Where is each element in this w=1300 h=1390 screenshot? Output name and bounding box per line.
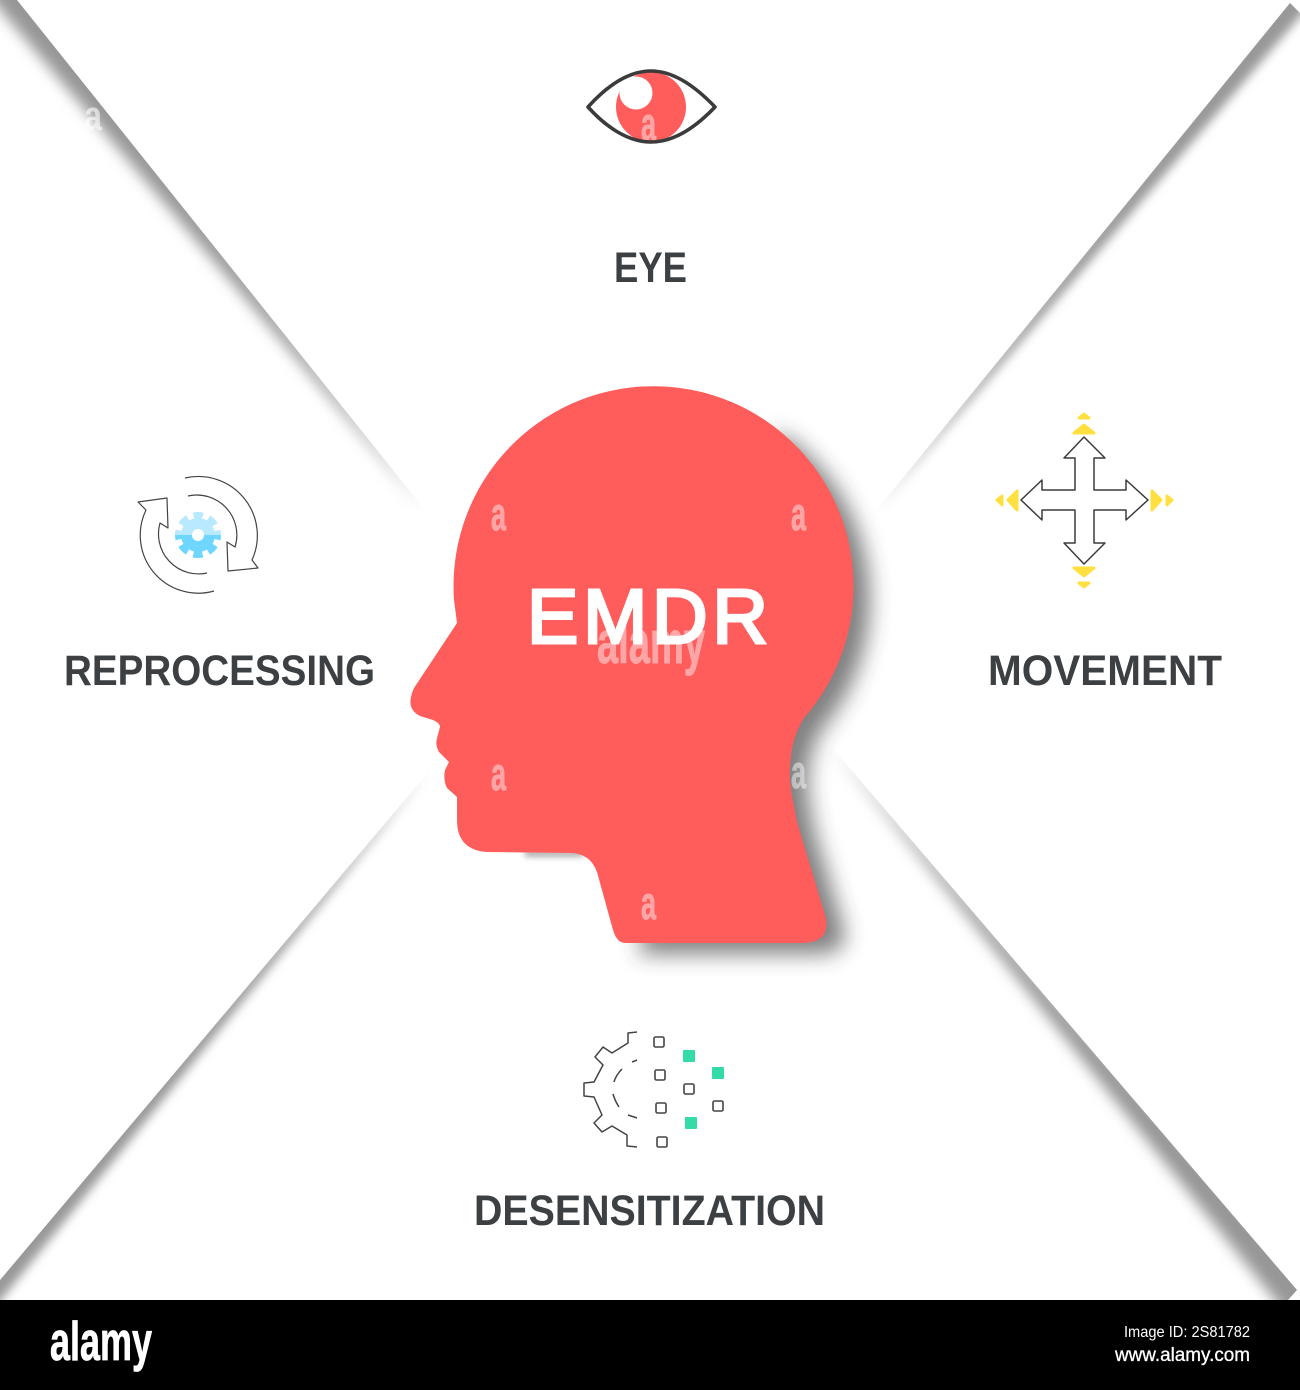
panel divider shadow: top left <box>0 0 425 510</box>
icon: reprocessing cycle with gear <box>138 476 258 593</box>
outlined squares <box>654 1037 723 1147</box>
icon: eye <box>588 71 715 150</box>
center title: EMDR: EMDR <box>527 574 768 660</box>
watermark letters on head: a <box>791 746 806 798</box>
watermark letters on head: alamy <box>597 609 705 676</box>
label: EYE: EYE <box>614 244 687 292</box>
panel divider shadow: bottom left <box>0 770 430 1316</box>
head shape <box>410 386 854 943</box>
watermark letters on head: a <box>791 488 806 540</box>
teal squares <box>683 1050 724 1129</box>
watermark on top left shadow: a <box>84 92 102 139</box>
iris <box>616 72 686 142</box>
website: www.alamy.com <box>1114 1345 1250 1366</box>
yellow triangles <box>997 414 1172 587</box>
under-jaw shadow <box>525 850 583 857</box>
label: DESENSITIZATION: DESENSITIZATION <box>474 1187 825 1235</box>
footer logo: alamy <box>50 1310 152 1372</box>
dashed inner arc <box>613 1060 637 1118</box>
head drop shadow <box>638 431 870 954</box>
gear <box>179 516 217 554</box>
head silhouette <box>410 386 870 954</box>
icon: four-way movement arrows <box>997 414 1172 587</box>
image id: Image ID: 2S81782 <box>1124 1324 1250 1341</box>
label: REPROCESSING: REPROCESSING <box>64 647 375 695</box>
highlight <box>620 76 652 110</box>
watermark letters on head: a <box>491 748 506 800</box>
eye outline <box>588 71 715 142</box>
footer bar <box>0 1300 1300 1390</box>
arrow left <box>138 498 214 593</box>
half gear outline <box>584 1032 637 1147</box>
cross arrow outline <box>1021 437 1148 564</box>
watermark letters on head: a <box>491 488 506 540</box>
panel divider shadow: bottom right <box>846 766 1297 1300</box>
watermark letters on head: a <box>641 877 656 929</box>
arrow right <box>185 476 258 571</box>
icon: desensitization gear dissolving <box>584 1032 724 1147</box>
label: MOVEMENT: MOVEMENT <box>988 647 1222 695</box>
panel divider shadow: top right <box>875 0 1300 512</box>
eye watermark: a <box>641 98 656 150</box>
watermark letters on head <box>491 488 806 929</box>
